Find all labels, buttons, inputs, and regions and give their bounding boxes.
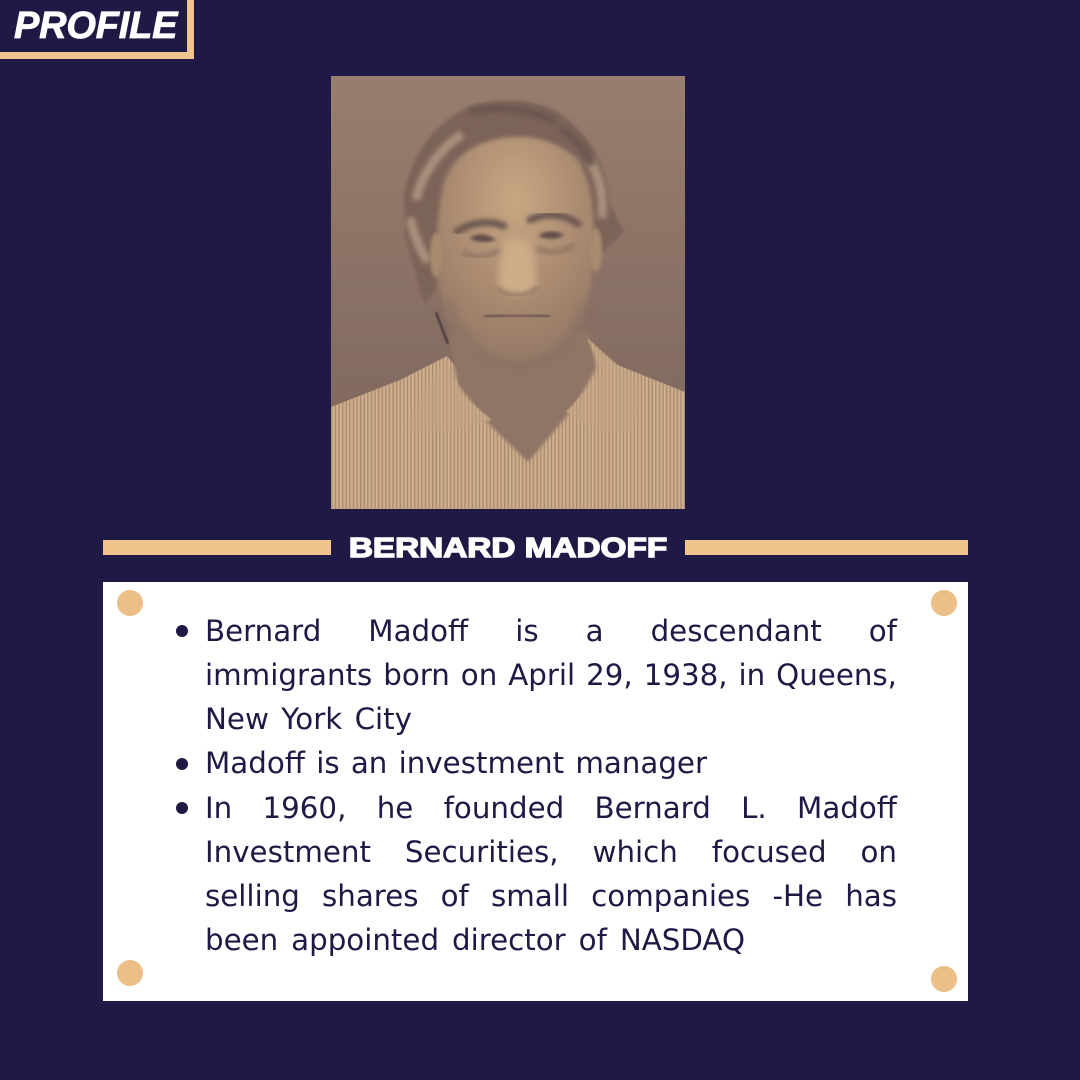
face bbox=[437, 137, 594, 365]
bullet text 1: immigrants born on April 29, 1938, in Queens, bbox=[205, 658, 897, 692]
hair highlights bbox=[410, 134, 602, 262]
neck line bbox=[436, 312, 448, 344]
left ear bbox=[430, 233, 442, 277]
bullet 2 bbox=[176, 758, 188, 770]
nose shadow bbox=[498, 286, 538, 295]
shirt bbox=[331, 338, 685, 509]
hair dark strands bbox=[470, 109, 592, 165]
left divider bar bbox=[103, 540, 331, 555]
hair bbox=[404, 100, 624, 304]
nose bbox=[499, 240, 536, 295]
eyebrows bbox=[457, 215, 578, 232]
heading text: PROFILE bbox=[14, 5, 177, 47]
name heading: BERNARD MADOFF bbox=[349, 532, 667, 563]
photo background bbox=[331, 76, 685, 509]
collar bbox=[408, 338, 640, 432]
bullet text 1: Bernard Madoff is a descendant of bbox=[205, 614, 897, 648]
right divider bar bbox=[685, 540, 968, 555]
eye shadows bbox=[462, 244, 575, 256]
corner pin bottom left bbox=[117, 960, 143, 986]
bullet 1 bbox=[176, 625, 188, 637]
bullet text 3 bbox=[205, 791, 898, 957]
bullet text 3: In 1960, he founded Bernard L. Madoff bbox=[205, 791, 897, 825]
eyes bbox=[470, 231, 564, 242]
bullet text 3: selling shares of small companies -He has bbox=[205, 879, 897, 913]
bullet text 3: Investment Securities, which focused on bbox=[205, 835, 897, 869]
mouth bbox=[484, 315, 550, 317]
corner pin top right bbox=[931, 590, 957, 616]
bullet text 2: Madoff is an investment manager bbox=[205, 746, 707, 780]
portrait photo bbox=[331, 76, 685, 509]
corner pin bottom right bbox=[931, 966, 957, 992]
corner pin top left bbox=[117, 590, 143, 616]
bullet text 1 bbox=[205, 614, 898, 736]
right ear bbox=[590, 228, 602, 272]
text panel bbox=[103, 582, 968, 1001]
jaw shadow bbox=[448, 300, 585, 365]
bullet text 3: been appointed director of NASDAQ bbox=[205, 923, 745, 957]
bullet text 1: New York City bbox=[205, 702, 412, 736]
neck bbox=[448, 330, 596, 462]
bullet 3 bbox=[176, 802, 188, 814]
profile heading badge bbox=[0, 0, 194, 59]
